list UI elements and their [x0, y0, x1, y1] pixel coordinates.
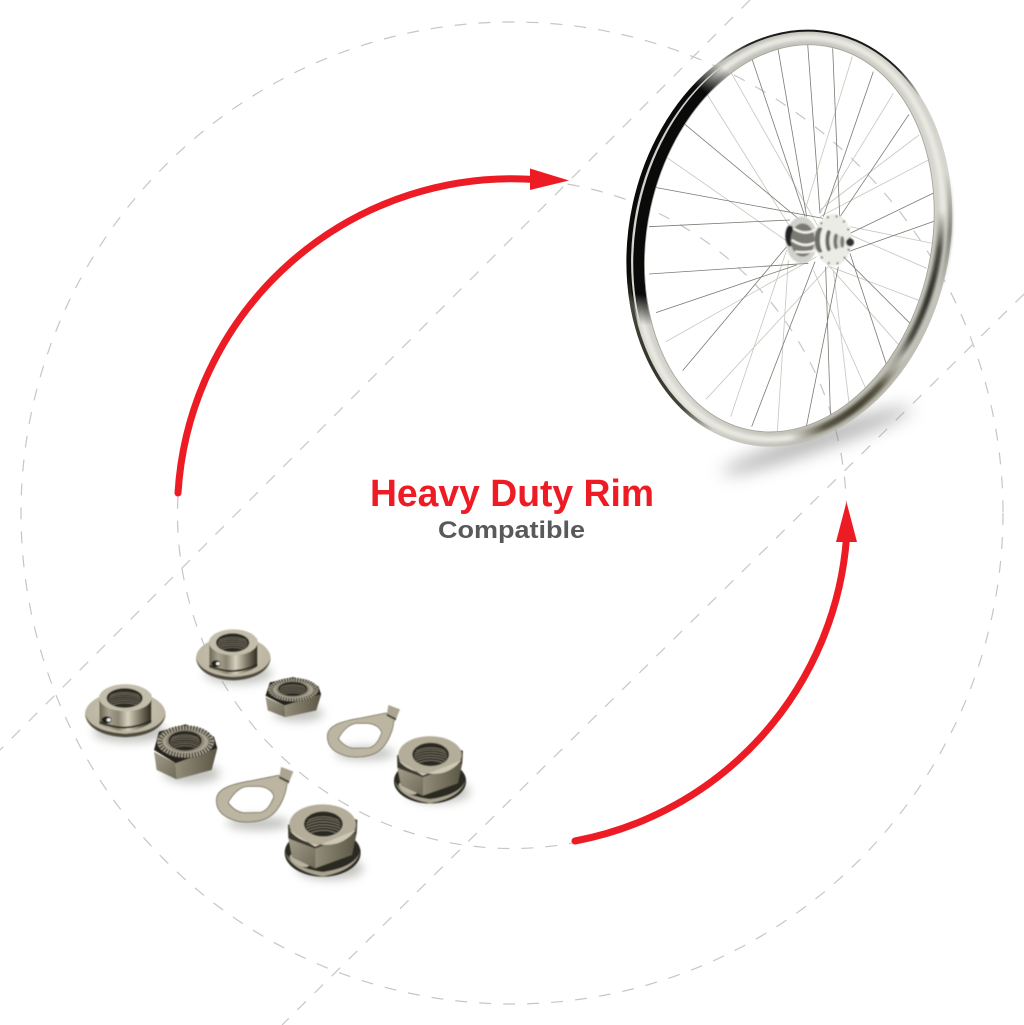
- subheading: Compatible: [438, 517, 585, 544]
- parts: [85, 629, 466, 877]
- wheel shadow: [719, 400, 914, 481]
- rim highlight band: [599, 8, 980, 469]
- left flange: [786, 217, 818, 263]
- rim lower-left edge: [590, 1, 989, 476]
- hex flange nut, right: [394, 736, 466, 803]
- wheel: [626, 30, 954, 483]
- rim inner edge: [609, 17, 970, 460]
- right flange: [815, 214, 852, 266]
- rim bottom sheen: [598, 8, 981, 469]
- dashed guide: upper diagonal: [0, 0, 750, 750]
- dashed guide: lower diagonal: [282, 294, 1024, 1025]
- hub: [785, 214, 854, 266]
- nuts and washers set: [85, 629, 470, 880]
- part shadows: [93, 663, 470, 880]
- rim dark bands left: [591, 1, 988, 475]
- spokes light: [663, 57, 936, 432]
- spokes dark: [649, 44, 938, 428]
- hex flange nut, front: [285, 804, 361, 877]
- red arrow: nuts to wheel: [178, 168, 569, 493]
- heading: Heavy Duty Rim: [370, 473, 654, 515]
- rim: [588, 0, 991, 478]
- dashed guide: inner circle: [178, 180, 846, 848]
- serrated nut, lower: [154, 724, 217, 779]
- lock washer, left: [216, 767, 293, 822]
- lock washer, right: [327, 705, 400, 757]
- cone stack: [815, 227, 825, 253]
- rim top edge: [589, 0, 990, 477]
- flanged nut with disc, top: [196, 629, 271, 680]
- axle end: [846, 238, 854, 246]
- serrated nut, top: [265, 677, 321, 717]
- rim right sheen: [600, 10, 978, 467]
- flanged nut with disc, left: [85, 684, 166, 737]
- red arrow: rim back to wheel: [575, 502, 857, 841]
